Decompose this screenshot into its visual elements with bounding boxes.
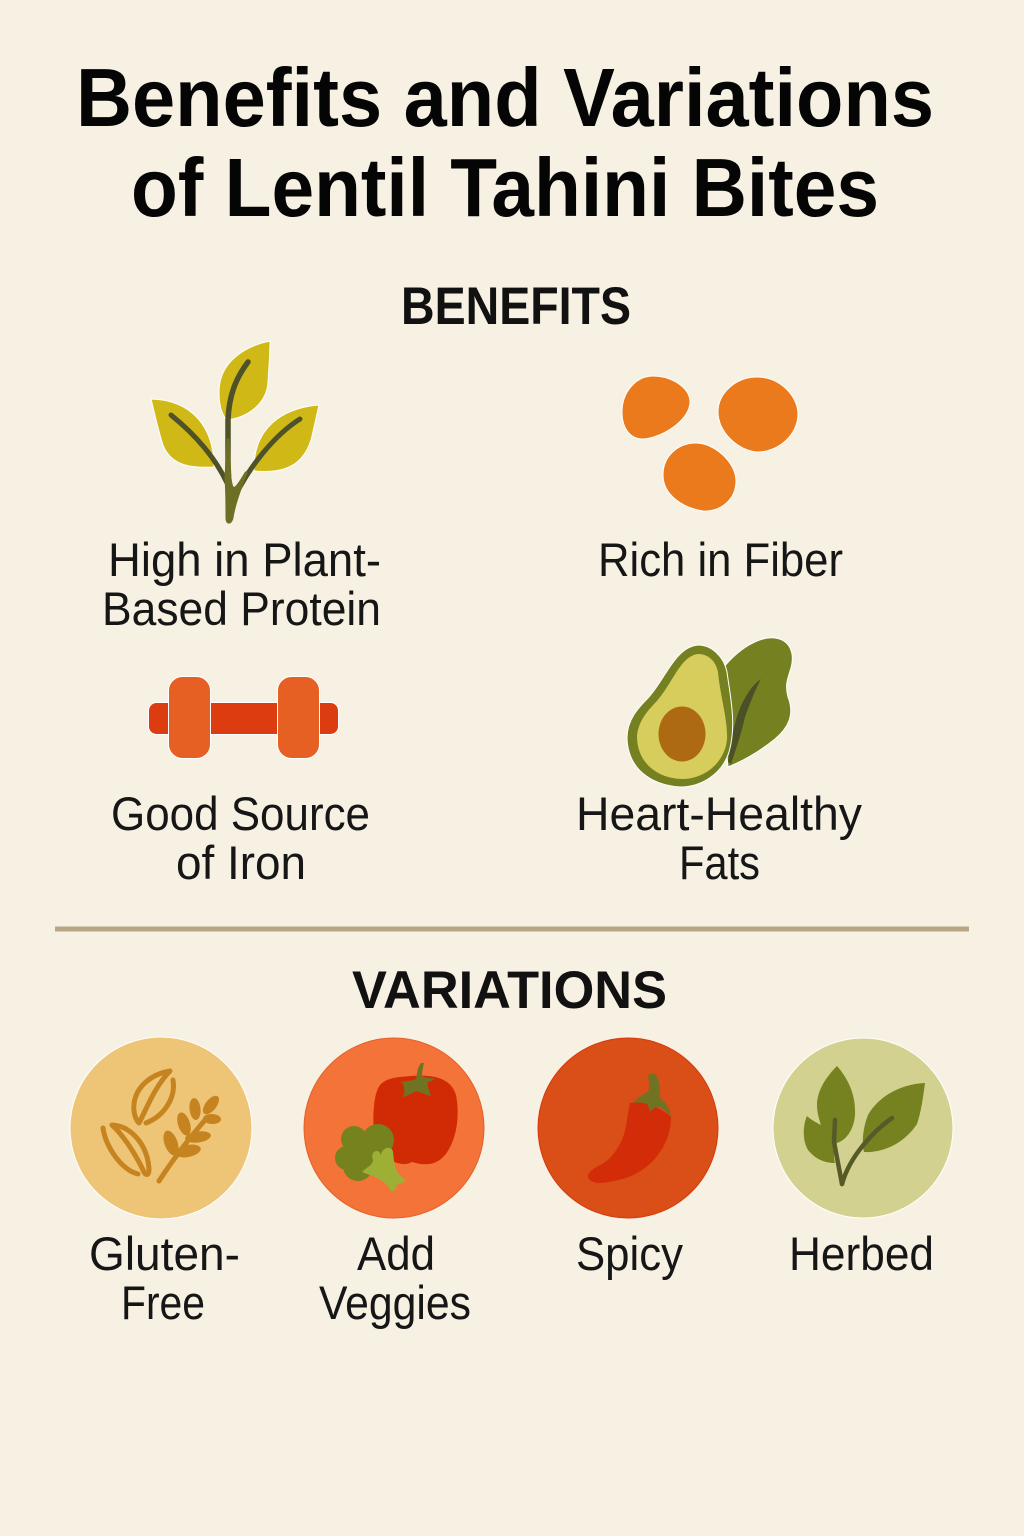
icon: dumbbell [148,676,338,758]
panel: rich in fiber [598,376,843,586]
label: Rich in Fiber [598,533,843,586]
icon: grains on amber circle [70,1037,252,1219]
heading: variations: VARIATIONS [352,961,667,1020]
title [76,51,934,234]
panel: spicy [538,1038,718,1280]
icon: avocado and leaf [627,638,792,787]
title: of Lentil Tahini Bites [131,141,879,234]
label: Herbed [789,1227,934,1280]
panel: heart-healthy fats [576,638,862,889]
heading: benefits: BENEFITS [401,277,631,336]
panel: add veggies [304,1038,484,1329]
label: Heart-Healthy [576,787,862,840]
label: Fats [679,836,760,889]
label: Gluten- [89,1227,240,1280]
icon: plant sprout [151,341,319,522]
title: Benefits and Variations [76,51,934,144]
panel: high in plant-based protein [102,341,381,635]
panel: good source of iron [111,676,370,889]
icon: herb leaves on sage circle [773,1038,953,1218]
label: Free [121,1276,205,1329]
label: of Iron [176,836,306,889]
icon: lentils [622,376,798,511]
panel: gluten-free [70,1037,252,1329]
label [111,787,370,889]
label: Good Source [111,787,370,840]
icon: pepper and broccoli on orange circle [304,1038,484,1218]
label: Add [357,1227,435,1280]
panel: herbed [773,1038,953,1280]
label [89,1227,240,1329]
label: High in Plant- [108,533,381,586]
label [102,533,381,635]
label [576,787,862,889]
label [319,1227,471,1329]
label: Spicy [576,1227,683,1280]
label: Based Protein [102,582,381,635]
icon: chili on red-orange circle [538,1038,718,1218]
label: Veggies [319,1276,471,1329]
